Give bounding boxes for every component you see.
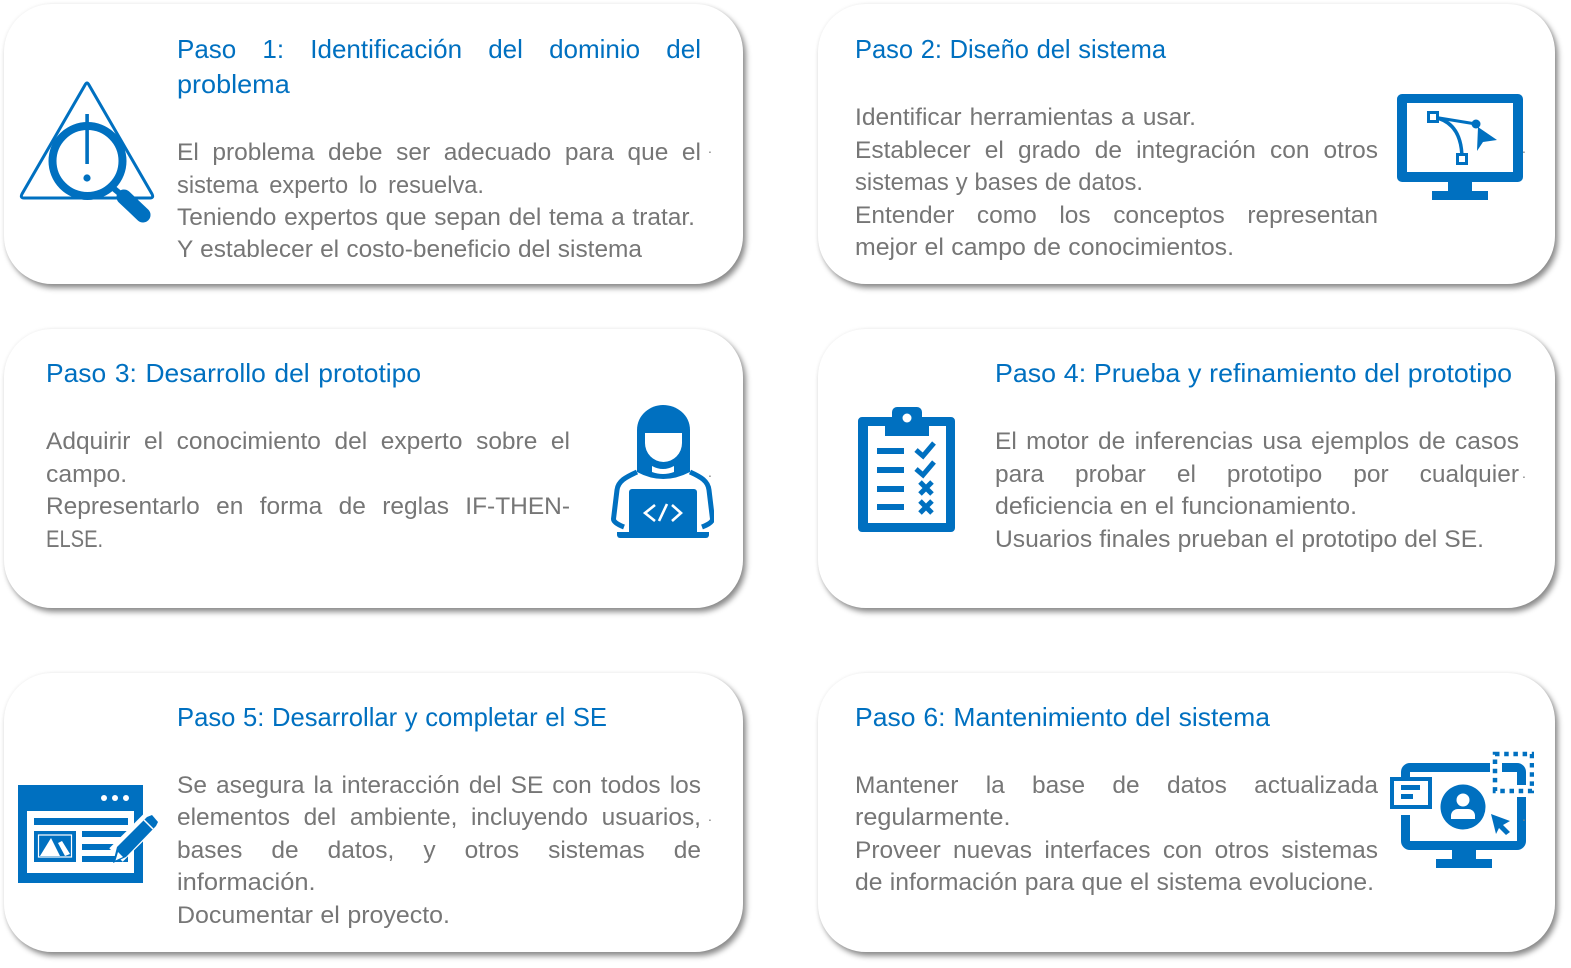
text: paso 3: Representarlo en forma de reglas IF-THEN- [46,493,570,520]
text: paso 2 [855,104,1378,261]
text: paso 1: sistema experto lo resuelva. [177,172,484,199]
text: paso 4: deficiencia en el funcionamiento. [995,493,1357,520]
text: paso 3: ELSE. [46,526,103,553]
text: paso 1 [177,139,701,263]
text: paso 2: Entender como los conceptos representan [855,202,1378,229]
text: paso 1: Y establecer el costo-beneficio del sistema [177,236,642,263]
text: paso 6: Mantener la base de datos actualizada [855,772,1378,799]
panel: paso 2 [818,4,1555,284]
panel: paso 6 [818,673,1555,952]
panel: paso 5 [4,673,743,952]
text: paso 2: Identificar herramientas a usar. [855,104,1196,131]
text: paso 4: El motor de inferencias usa ejemplos de casos [995,428,1519,455]
text: paso 1: Teniendo expertos que sepan del tema a tratar. [177,204,695,231]
heading: paso 6: Paso 6: Mantenimiento del sistema [855,702,1270,732]
text: paso 5: elementos del ambiente, incluyendo usuarios, [177,804,701,831]
text: paso 4: Usuarios finales prueban el prototipo del SE. [995,526,1484,553]
mark: dot: . [708,808,712,824]
icon: developer with laptop [611,405,714,538]
heading: paso 1: problema [177,69,290,99]
heading: paso 3: Paso 3: Desarrollo del prototipo [46,358,421,388]
text: paso 5 [177,772,701,929]
text: paso 3: Adquirir el conocimiento del experto sobre el [46,428,570,455]
text: paso 6: de información para que el sistema evolucione. [855,869,1374,896]
text: paso 2: mejor el campo de conocimientos. [855,234,1234,261]
text: paso 1: El problema debe ser adecuado para que el [177,139,701,166]
panel: paso 3 [4,329,743,608]
heading: paso 1 [177,34,701,99]
heading: paso 1: Paso 1: Identificación del dominio del [177,34,701,64]
panel: paso 4 [818,329,1555,608]
mark: dot: . [1522,465,1526,481]
heading: paso 4: Paso 4: Prueba y refinamiento del prototipo [995,358,1512,388]
text: paso 6: Proveer nuevas interfaces con otros sistemas [855,837,1378,864]
text: paso 4 [995,428,1519,553]
text: paso 3: campo. [46,461,127,488]
mark: dot: . [708,140,712,156]
icon: warning triangle with magnifier [20,82,154,222]
text: paso 5: bases de datos, y otros sistemas de [177,837,701,864]
text: paso 6 [855,772,1378,896]
icon: web page with pencil [18,785,158,883]
text: paso 6: regularmente. [855,804,1010,831]
icon: monitor with user and cursor [1390,752,1534,868]
text: paso 2: Establecer el grado de integración con otros [855,137,1378,164]
text: paso 5: información. [177,869,316,896]
icon: clipboard checklist [858,407,955,532]
text: paso 5: Documentar el proyecto. [177,902,450,929]
text: paso 5: Se asegura la interacción del SE con todos los [177,772,701,799]
text: paso 2: sistemas y bases de datos. [855,169,1143,196]
heading: paso 2: Paso 2: Diseño del sistema [855,34,1166,64]
mark: dot: . [708,464,712,480]
text: paso 3 [46,428,570,553]
text: paso 4: para probar el prototipo por cualquier [995,461,1519,488]
panel: paso 1 [4,4,743,284]
mark: dot: . [1522,140,1526,156]
heading: paso 5: Paso 5: Desarrollar y completar el SE [177,702,607,732]
mark: dot: . [1522,808,1526,824]
icon: monitor with vector curve [1397,94,1523,200]
